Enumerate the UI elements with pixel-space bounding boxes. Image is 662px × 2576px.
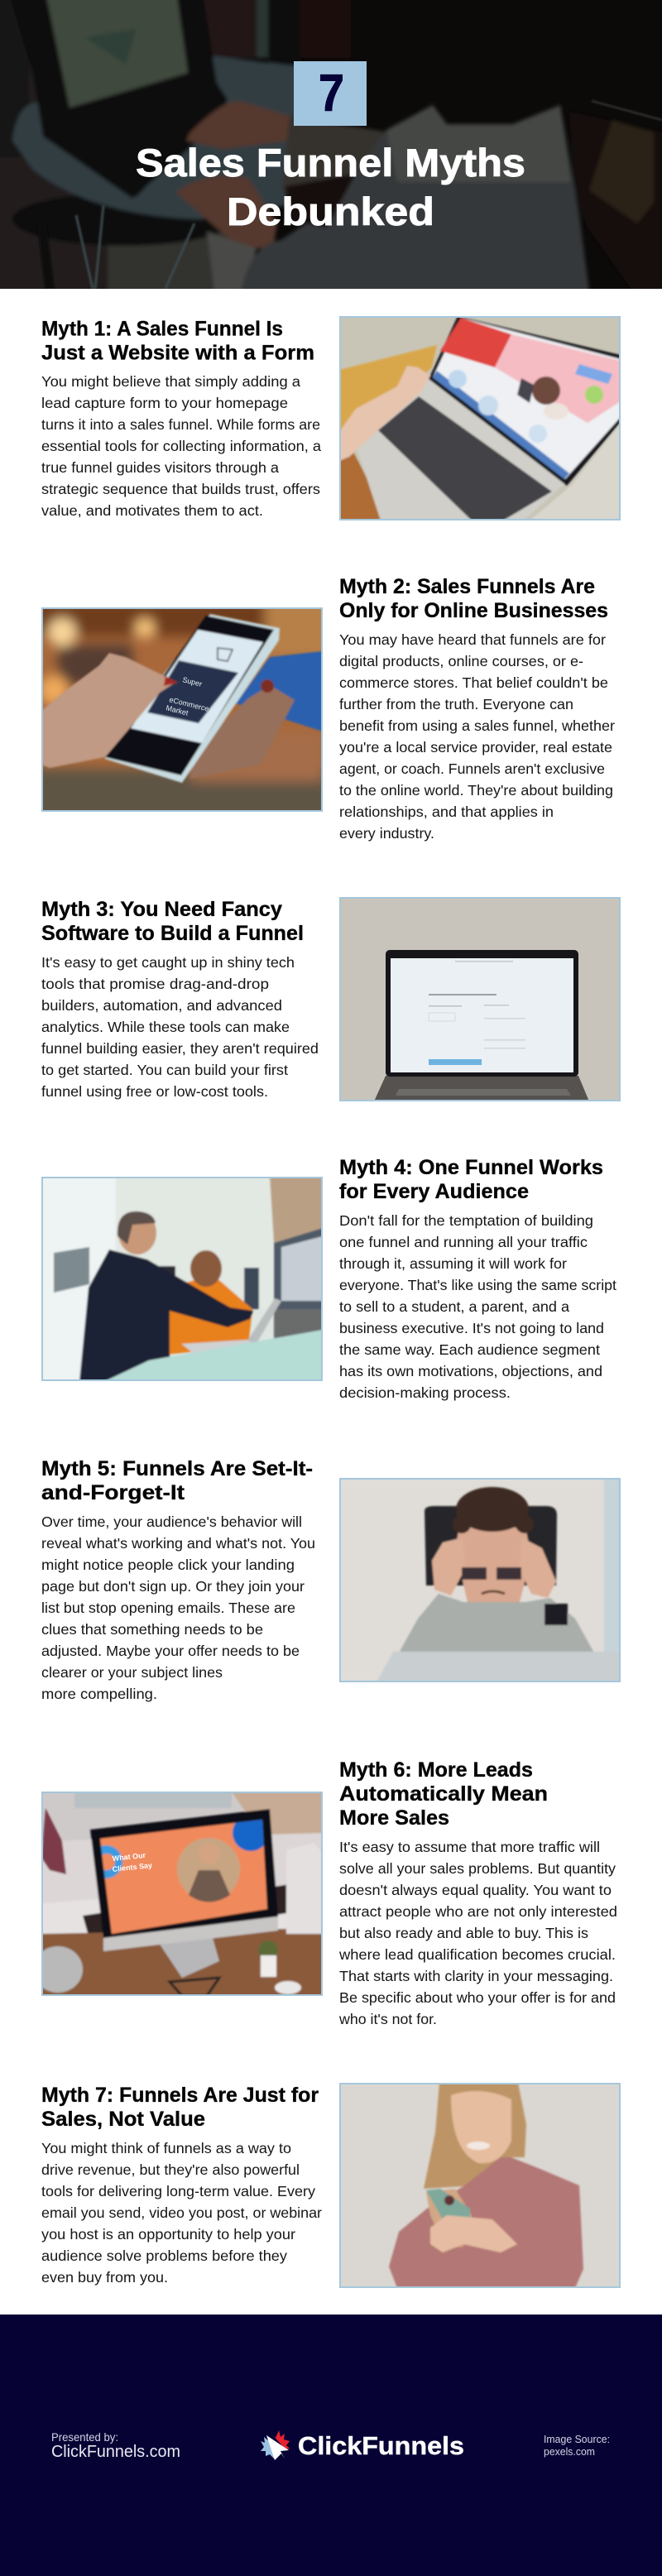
body text: myth 4: everyone. That's like using the same script bbox=[339, 1277, 616, 1293]
heading: myth 6: More Sales bbox=[339, 1806, 449, 1830]
body text: myth 6: but also ready and able to buy. This is bbox=[339, 1925, 588, 1941]
body text: myth 6: It's easy to assume that more traffic will bbox=[339, 1839, 600, 1855]
body text: myth 1: value, and motivates them to act. bbox=[41, 502, 263, 519]
photo: smartphone shopping bbox=[33, 599, 331, 820]
body text: myth 2: You may have heard that funnels are for bbox=[339, 631, 606, 648]
body text: myth 6: doesn't always equal quality. You want to bbox=[339, 1882, 612, 1898]
panel: myth 3 bbox=[41, 897, 621, 1101]
body text: myth 4: decision-making process. bbox=[339, 1384, 511, 1401]
panel: myth 1 bbox=[41, 316, 621, 520]
heading: myth 5 bbox=[41, 1457, 313, 1504]
body text: myth 2: relationships, and that applies in bbox=[339, 804, 554, 820]
body text: myth 2 bbox=[339, 631, 615, 842]
body text: myth 7: drive revenue, but they're also powerful bbox=[41, 2161, 300, 2178]
body text: myth 5: list but stop opening emails. These are bbox=[41, 1600, 295, 1616]
presented by: Presented by: bbox=[51, 2430, 118, 2444]
body text: myth 3: builders, automation, and advanced bbox=[41, 997, 282, 1014]
heading: myth 4: for Every Audience bbox=[339, 1180, 529, 1203]
body text: myth 3: It's easy to get caught up in shiny tech bbox=[41, 954, 295, 971]
body text: myth 6: who it's not for. bbox=[338, 2011, 437, 2027]
body text: myth 5: clues that something needs to be bbox=[41, 1621, 263, 1638]
panel: myth 4 bbox=[41, 1156, 616, 1401]
header background photo bbox=[0, 0, 662, 289]
presented by: ClickFunnels.com bbox=[51, 2443, 180, 2461]
image source: pexels.com bbox=[544, 2446, 595, 2458]
body text: myth 1: turns it into a sales funnel. While forms are bbox=[41, 416, 320, 433]
heading: myth 2: Only for Online Businesses bbox=[339, 599, 608, 622]
body text: myth 4 bbox=[339, 1212, 616, 1401]
body text: myth 3: analytics. While these tools can make bbox=[41, 1019, 290, 1035]
body text: myth 4: Don't fall for the temptation of building bbox=[339, 1212, 593, 1229]
header banner bbox=[0, 0, 662, 298]
body text: myth 1: essential tools for collecting information, a bbox=[41, 438, 321, 454]
heading: myth 1 bbox=[41, 318, 314, 364]
heading: myth 1: Myth 1: A Sales Funnel Is bbox=[41, 318, 283, 341]
title: Debunked bbox=[227, 189, 434, 233]
body text: myth 2: commerce stores. That belief couldn't be bbox=[339, 674, 608, 691]
photo: desktop monitor on desk: What Our bbox=[112, 1851, 146, 1863]
body text: myth 2: every industry. bbox=[339, 825, 434, 842]
body text: myth 2: benefit from using a sales funnel, whether bbox=[339, 717, 615, 734]
body text: myth 2: further from the truth. Everyone can bbox=[339, 696, 573, 712]
body text: myth 2: to the online world. They're about building bbox=[339, 782, 613, 799]
image source bbox=[544, 2434, 610, 2458]
body text: myth 7: tools for delivering long-term value. Every bbox=[41, 2183, 315, 2199]
heading: myth 3 bbox=[41, 898, 304, 945]
panel: myth 5 bbox=[41, 1457, 621, 1702]
body text: myth 1 bbox=[41, 373, 321, 519]
body text: myth 4: business executive. It's not going to land bbox=[339, 1320, 604, 1336]
body text: myth 1: true funnel guides visitors through a bbox=[41, 459, 279, 476]
body text: myth 3: to get started. You can build your first bbox=[41, 1062, 288, 1078]
body text: myth 4: one funnel and running all your traffic bbox=[339, 1234, 588, 1250]
footer bbox=[0, 2315, 662, 2576]
heading: myth 3: Software to Build a Funnel bbox=[41, 922, 304, 945]
heading: myth 1: Just a Website with a Form bbox=[41, 341, 314, 364]
body text: myth 2: you're a local service provider, real estate bbox=[339, 739, 612, 756]
body text: myth 7 bbox=[41, 2140, 322, 2286]
body text: myth 2: digital products, online courses, or e- bbox=[339, 653, 583, 669]
body text: myth 7: even buy from you. bbox=[41, 2269, 168, 2286]
body text: myth 1: lead capture form to your homepage bbox=[41, 395, 288, 411]
body text: myth 5: adjusted. Maybe your offer needs to be bbox=[41, 1643, 300, 1659]
photo: desktop monitor on desk bbox=[33, 1792, 323, 1996]
photo: laptop with online store bbox=[339, 316, 621, 520]
body text: myth 6: That starts with clarity in your messaging. bbox=[339, 1968, 613, 1984]
heading: myth 6 bbox=[339, 1758, 548, 1830]
photo: two men at a laptop bbox=[41, 1177, 323, 1381]
photo: desktop monitor on desk: Clients Say bbox=[112, 1861, 152, 1873]
logo wordmark: ClickFunnels bbox=[298, 2431, 464, 2460]
image source: Image Source: bbox=[544, 2434, 610, 2445]
body text: myth 4: has its own motivations, objections, and bbox=[339, 1363, 602, 1379]
title bbox=[136, 141, 525, 233]
body text: myth 3: funnel using free or low-cost tools. bbox=[41, 1083, 268, 1100]
icon: ClickFunnels cursor logo bbox=[261, 2430, 290, 2460]
panel: myth 6 bbox=[33, 1758, 617, 2027]
heading: myth 7: Sales, Not Value bbox=[41, 2108, 205, 2131]
body text: myth 5: page but don't sign up. Or they join your bbox=[41, 1578, 305, 1595]
body text: myth 1: strategic sequence that builds trust, offers bbox=[41, 481, 320, 497]
photo: stressed man at laptop bbox=[339, 1478, 621, 1682]
body text: myth 6: attract people who are not only interested bbox=[339, 1903, 617, 1920]
body text: myth 3 bbox=[41, 954, 319, 1100]
number badge: 7 bbox=[319, 65, 344, 122]
photo: smartphone shopping: eCommerce bbox=[169, 695, 209, 713]
body text: myth 6: where lead qualification becomes crucial. bbox=[338, 1946, 616, 1963]
body text: myth 6: solve all your sales problems. But quantity bbox=[339, 1860, 616, 1877]
body text: myth 7: email you send, video you post, or webinar bbox=[41, 2204, 322, 2221]
body text: myth 4: through it, assuming it will work for bbox=[339, 1255, 567, 1272]
heading: myth 4 bbox=[339, 1156, 603, 1203]
body text: myth 5: reveal what's working and what's not. You bbox=[41, 1535, 315, 1552]
body text: myth 4: to sell to a student, a parent, and a bbox=[339, 1298, 569, 1315]
heading: myth 3: Myth 3: You Need Fancy bbox=[41, 898, 282, 921]
title: Sales Funnel Myths bbox=[136, 141, 525, 185]
body text: myth 5 bbox=[41, 1513, 315, 1702]
photo: woman smiling at phone bbox=[339, 2083, 621, 2288]
body text: myth 6: Be specific about who your offer is for and bbox=[339, 1989, 616, 2006]
presented by bbox=[51, 2430, 180, 2461]
body text: myth 7: You might think of funnels as a way to bbox=[41, 2140, 291, 2156]
body text: myth 5: might notice people click your landing bbox=[41, 1557, 295, 1573]
photo: laptop on beige wall bbox=[339, 897, 621, 1101]
heading: myth 5: Myth 5: Funnels Are Set-It- bbox=[41, 1457, 313, 1480]
body text: myth 5: Over time, your audience's behavior will bbox=[41, 1513, 302, 1530]
body text: myth 6 bbox=[338, 1839, 617, 2027]
photo: smartphone shopping: Market bbox=[166, 703, 189, 717]
body text: myth 5: more compelling. bbox=[41, 1686, 157, 1702]
body text: myth 7: audience solve problems before they bbox=[41, 2247, 287, 2264]
heading: myth 6: Myth 6: More Leads bbox=[339, 1758, 533, 1782]
body text: myth 5: clearer or your subject lines bbox=[41, 1664, 223, 1681]
body text: myth 2: agent, or coach. Funnels aren't exclusive bbox=[339, 760, 605, 777]
panel: myth 2 bbox=[33, 575, 615, 842]
photo: smartphone shopping: Super bbox=[182, 675, 203, 688]
heading: myth 7 bbox=[41, 2084, 319, 2131]
heading: myth 4: Myth 4: One Funnel Works bbox=[339, 1156, 603, 1179]
body text: myth 7: you host is an opportunity to help your bbox=[41, 2226, 295, 2243]
heading: myth 6: Automatically Mean bbox=[339, 1782, 548, 1806]
heading: myth 5: and-Forget-It bbox=[41, 1481, 185, 1504]
heading: myth 2: Myth 2: Sales Funnels Are bbox=[339, 575, 595, 598]
heading: myth 7: Myth 7: Funnels Are Just for bbox=[41, 2084, 319, 2107]
body text: myth 3: tools that promise drag-and-drop bbox=[41, 976, 269, 992]
heading: myth 2 bbox=[339, 575, 608, 622]
body text: myth 3: funnel building easier, they aren't required bbox=[41, 1040, 319, 1057]
body text: myth 1: You might believe that simply adding a bbox=[41, 373, 300, 390]
body text: myth 4: the same way. Each audience segment bbox=[339, 1341, 600, 1358]
panel: myth 7 bbox=[41, 2083, 621, 2288]
number badge bbox=[294, 61, 367, 126]
